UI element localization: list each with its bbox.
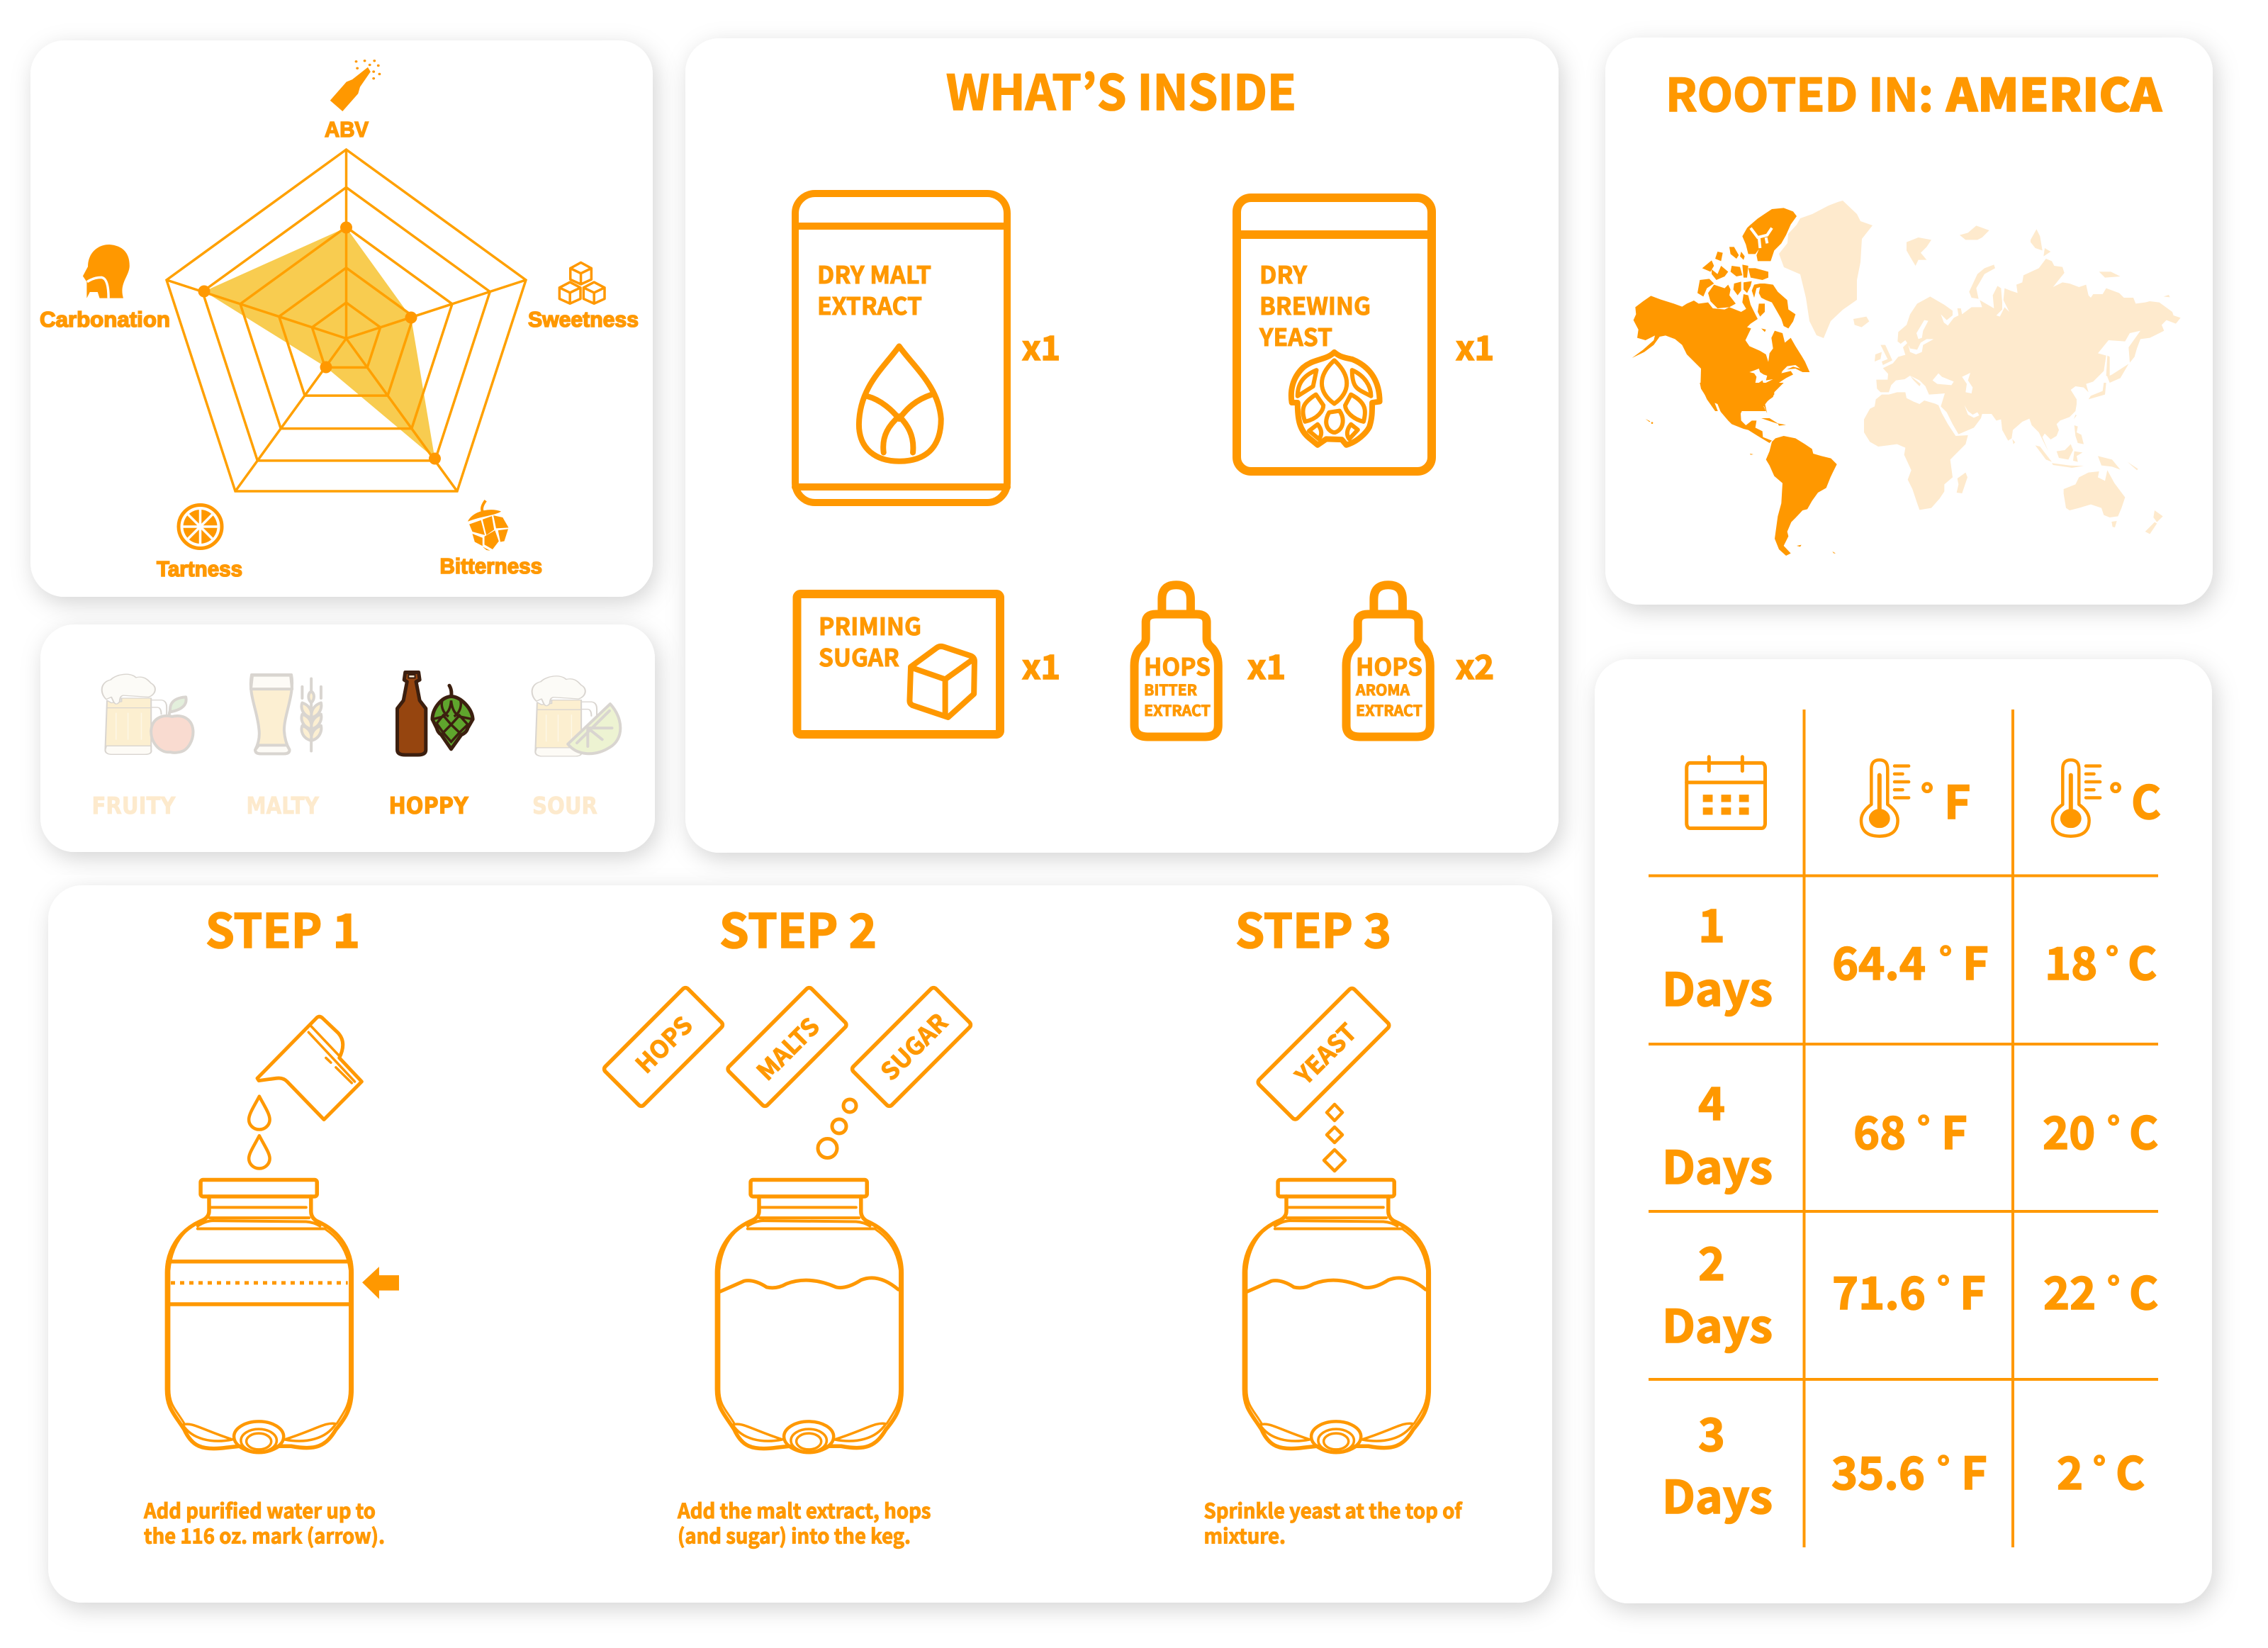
north america xyxy=(1632,208,1809,411)
icon: sugar cubes xyxy=(559,262,605,303)
row 2 fahrenheit: F xyxy=(1941,1098,1967,1162)
row 4 celsius: 2 xyxy=(2057,1438,2083,1503)
icon: measuring pitcher xyxy=(257,1016,361,1119)
row 3 fahrenheit: F xyxy=(1960,1258,1986,1323)
label: Carbonation: Carbonation xyxy=(40,307,170,332)
row 4 days: 3 xyxy=(1698,1399,1725,1464)
heading: step 3: STEP 3 xyxy=(1235,894,1391,962)
row 1 days: 1 xyxy=(1698,890,1725,955)
label: Tartness: Tartness xyxy=(157,556,242,581)
icon: yeast granules xyxy=(1324,1104,1345,1171)
hops aroma extract bottle xyxy=(1347,585,1430,736)
row 2 days: 4 xyxy=(1698,1068,1725,1133)
quantity: bitter x1: x1 xyxy=(1247,640,1286,689)
box outline xyxy=(797,594,1000,734)
table grid xyxy=(1649,710,2158,1547)
panel: what's inside xyxy=(685,38,1559,853)
bottle label: BITTER xyxy=(1144,679,1197,700)
row 1 celsius: C xyxy=(2128,929,2157,993)
label: Sweetness: Sweetness xyxy=(528,307,639,332)
row 2 days: Days xyxy=(1662,1132,1773,1197)
keg with liquid xyxy=(1244,1180,1429,1452)
packet outline xyxy=(851,987,972,1107)
packet outline xyxy=(603,987,724,1107)
arrow: 116 oz mark xyxy=(362,1267,399,1299)
bag label: BREWING xyxy=(1259,287,1371,322)
dry brewing yeast bag xyxy=(1237,198,1432,471)
step 3 instructions: Sprinkle yeast at the top of xyxy=(1203,1495,1463,1525)
row 4 fahrenheit: F xyxy=(1961,1438,1987,1503)
panel: brewing steps xyxy=(48,885,1552,1603)
row 2 fahrenheit: ° xyxy=(1917,1103,1930,1149)
panel: fermentation schedule table xyxy=(1595,659,2212,1603)
radar data area xyxy=(204,228,435,459)
heading: rooted in america: AMERICA xyxy=(1946,60,2162,125)
radar card xyxy=(30,40,653,597)
bag label: DRY xyxy=(1259,256,1307,291)
what's inside card xyxy=(685,38,1559,853)
packet: malts xyxy=(726,987,848,1107)
bottle outline xyxy=(1347,585,1430,736)
quantity: malt x1: x1 xyxy=(1022,321,1060,370)
quantity: yeast x1: x1 xyxy=(1456,321,1494,370)
label: FRUITY: FRUITY xyxy=(92,792,176,819)
bottle outline xyxy=(1135,585,1218,736)
bottle label: HOPS xyxy=(1144,648,1211,683)
panel: flavour styles xyxy=(40,624,655,852)
bag label: EXTRACT xyxy=(817,287,922,322)
row 4 days: Days xyxy=(1662,1462,1773,1527)
row 2 fahrenheit: 68 xyxy=(1853,1098,1906,1162)
packet text: YEAST xyxy=(1286,1014,1363,1092)
row 2 celsius: 20 xyxy=(2043,1098,2095,1162)
icon: sugar cube xyxy=(909,646,975,717)
calendar cells xyxy=(1703,795,1749,815)
bag outline xyxy=(795,194,1007,503)
icon: calendar xyxy=(1687,757,1765,828)
label: MALTY: MALTY xyxy=(247,792,320,819)
keg with liquid xyxy=(717,1180,902,1452)
priming sugar box xyxy=(797,594,1000,734)
row 3 celsius: 22 xyxy=(2043,1258,2096,1323)
row 1 fahrenheit: F xyxy=(1963,929,1989,993)
row 1 celsius: 18 xyxy=(2045,929,2097,993)
packet: yeast xyxy=(1257,987,1391,1121)
icon: hop xyxy=(1291,352,1380,445)
header: degrees C: C xyxy=(2131,767,2161,832)
bag label: YEAST xyxy=(1259,318,1332,353)
step 2 instructions: (and sugar) into the keg. xyxy=(678,1520,911,1549)
heading: rooted in america: ROOTED IN: xyxy=(1666,60,1933,125)
keg with fill mark xyxy=(167,1180,352,1452)
packet: hops xyxy=(603,987,724,1107)
box label: SUGAR xyxy=(819,639,899,673)
row 3 celsius: ° xyxy=(2107,1263,2120,1309)
row 2 celsius: ° xyxy=(2107,1103,2120,1149)
packet text: HOPS xyxy=(627,1007,699,1080)
flavour card xyxy=(40,624,655,852)
steps card xyxy=(48,885,1552,1603)
step 2 instructions: Add the malt extract, hops xyxy=(677,1495,931,1525)
icon: head and throat xyxy=(83,245,130,298)
africa, asia-pacific and oceania xyxy=(1864,383,2163,534)
radar data points xyxy=(198,221,441,465)
header: degrees F: ° xyxy=(1921,770,1933,817)
row 1 fahrenheit: 64.4 xyxy=(1832,929,1926,993)
great lakes and arctic channels xyxy=(1749,228,1800,384)
row 1 days: Days xyxy=(1662,954,1773,1019)
packet outline xyxy=(1257,987,1391,1121)
icon: champagne bottle xyxy=(330,60,381,111)
step 1 xyxy=(143,894,399,1549)
header: degrees C: ° xyxy=(2109,770,2122,817)
step 3 xyxy=(1203,894,1463,1549)
icon: beer mug and lime xyxy=(532,676,620,756)
hops bitter extract bottle xyxy=(1135,585,1218,736)
central and south america xyxy=(1646,383,1837,556)
row 1 celsius: ° xyxy=(2106,934,2118,980)
icon: beer bottle and hop xyxy=(398,672,473,755)
row 4 fahrenheit: ° xyxy=(1937,1443,1950,1489)
icon: thermometer fahrenheit xyxy=(1861,760,1909,836)
packet outline xyxy=(726,987,848,1107)
row 4 celsius: ° xyxy=(2093,1443,2106,1489)
inland seas xyxy=(1916,320,1980,417)
icon: wheat beer glass xyxy=(251,675,321,753)
label: ABV: ABV xyxy=(325,117,369,142)
step 1 instructions: Add purified water up to xyxy=(143,1495,376,1525)
bottle label: HOPS xyxy=(1356,648,1422,683)
label: HOPPY: HOPPY xyxy=(388,792,469,819)
panel: flavour radar xyxy=(30,40,653,597)
box label: PRIMING xyxy=(819,607,921,642)
panel: rooted in america xyxy=(1605,38,2213,605)
bottle label: EXTRACT xyxy=(1144,700,1211,721)
icon: thermometer celsius xyxy=(2053,760,2100,836)
packet text: SUGAR xyxy=(872,1004,954,1087)
bag outline xyxy=(1237,198,1432,471)
row 4 celsius: C xyxy=(2116,1438,2145,1503)
dry malt extract bag xyxy=(795,194,1007,503)
icon: orange slice xyxy=(179,505,222,549)
radar chart xyxy=(167,150,526,491)
row 2 celsius: C xyxy=(2129,1098,2158,1162)
heading: step 1: STEP 1 xyxy=(206,894,360,962)
packet text: MALTS xyxy=(748,1009,826,1087)
step 3 instructions: mixture. xyxy=(1203,1520,1286,1549)
row 3 celsius: C xyxy=(2129,1258,2158,1323)
table card xyxy=(1595,659,2212,1603)
row 3 days: Days xyxy=(1662,1291,1773,1356)
bottle label: AROMA xyxy=(1355,679,1410,700)
icon: hop cone xyxy=(468,500,509,551)
step 2 xyxy=(603,894,972,1549)
row 1 fahrenheit: ° xyxy=(1939,934,1952,980)
icon: water drops xyxy=(249,1097,270,1168)
eurasia and northern islands xyxy=(1853,225,2181,452)
packet: sugar xyxy=(851,987,972,1107)
label: Bitterness: Bitterness xyxy=(439,554,542,578)
radar grid xyxy=(167,150,526,491)
icon: bubbles xyxy=(818,1099,856,1158)
step 1 instructions: the 116 oz. mark (arrow). xyxy=(144,1520,385,1549)
heading: what's inside: WHAT’S INSIDE xyxy=(946,54,1296,124)
calendar outline xyxy=(1687,757,1765,828)
greenland xyxy=(1779,201,1873,338)
quantity: sugar x1: x1 xyxy=(1022,640,1060,689)
row 4 fahrenheit: 35.6 xyxy=(1831,1438,1925,1503)
label: SOUR: SOUR xyxy=(532,792,597,819)
world map xyxy=(1632,201,2181,556)
map card xyxy=(1605,38,2213,605)
bottle label: EXTRACT xyxy=(1356,700,1422,721)
icon: beer mug and apple xyxy=(102,674,193,754)
quantity: aroma x2: x2 xyxy=(1456,640,1494,689)
header: degrees F: F xyxy=(1944,767,1970,832)
bag label: DRY MALT xyxy=(817,256,931,291)
icon: malt drop xyxy=(859,346,941,461)
row 3 fahrenheit: ° xyxy=(1937,1263,1950,1309)
row 3 days: 2 xyxy=(1698,1228,1725,1294)
row 3 fahrenheit: 71.6 xyxy=(1832,1258,1926,1323)
heading: step 2: STEP 2 xyxy=(719,894,877,962)
